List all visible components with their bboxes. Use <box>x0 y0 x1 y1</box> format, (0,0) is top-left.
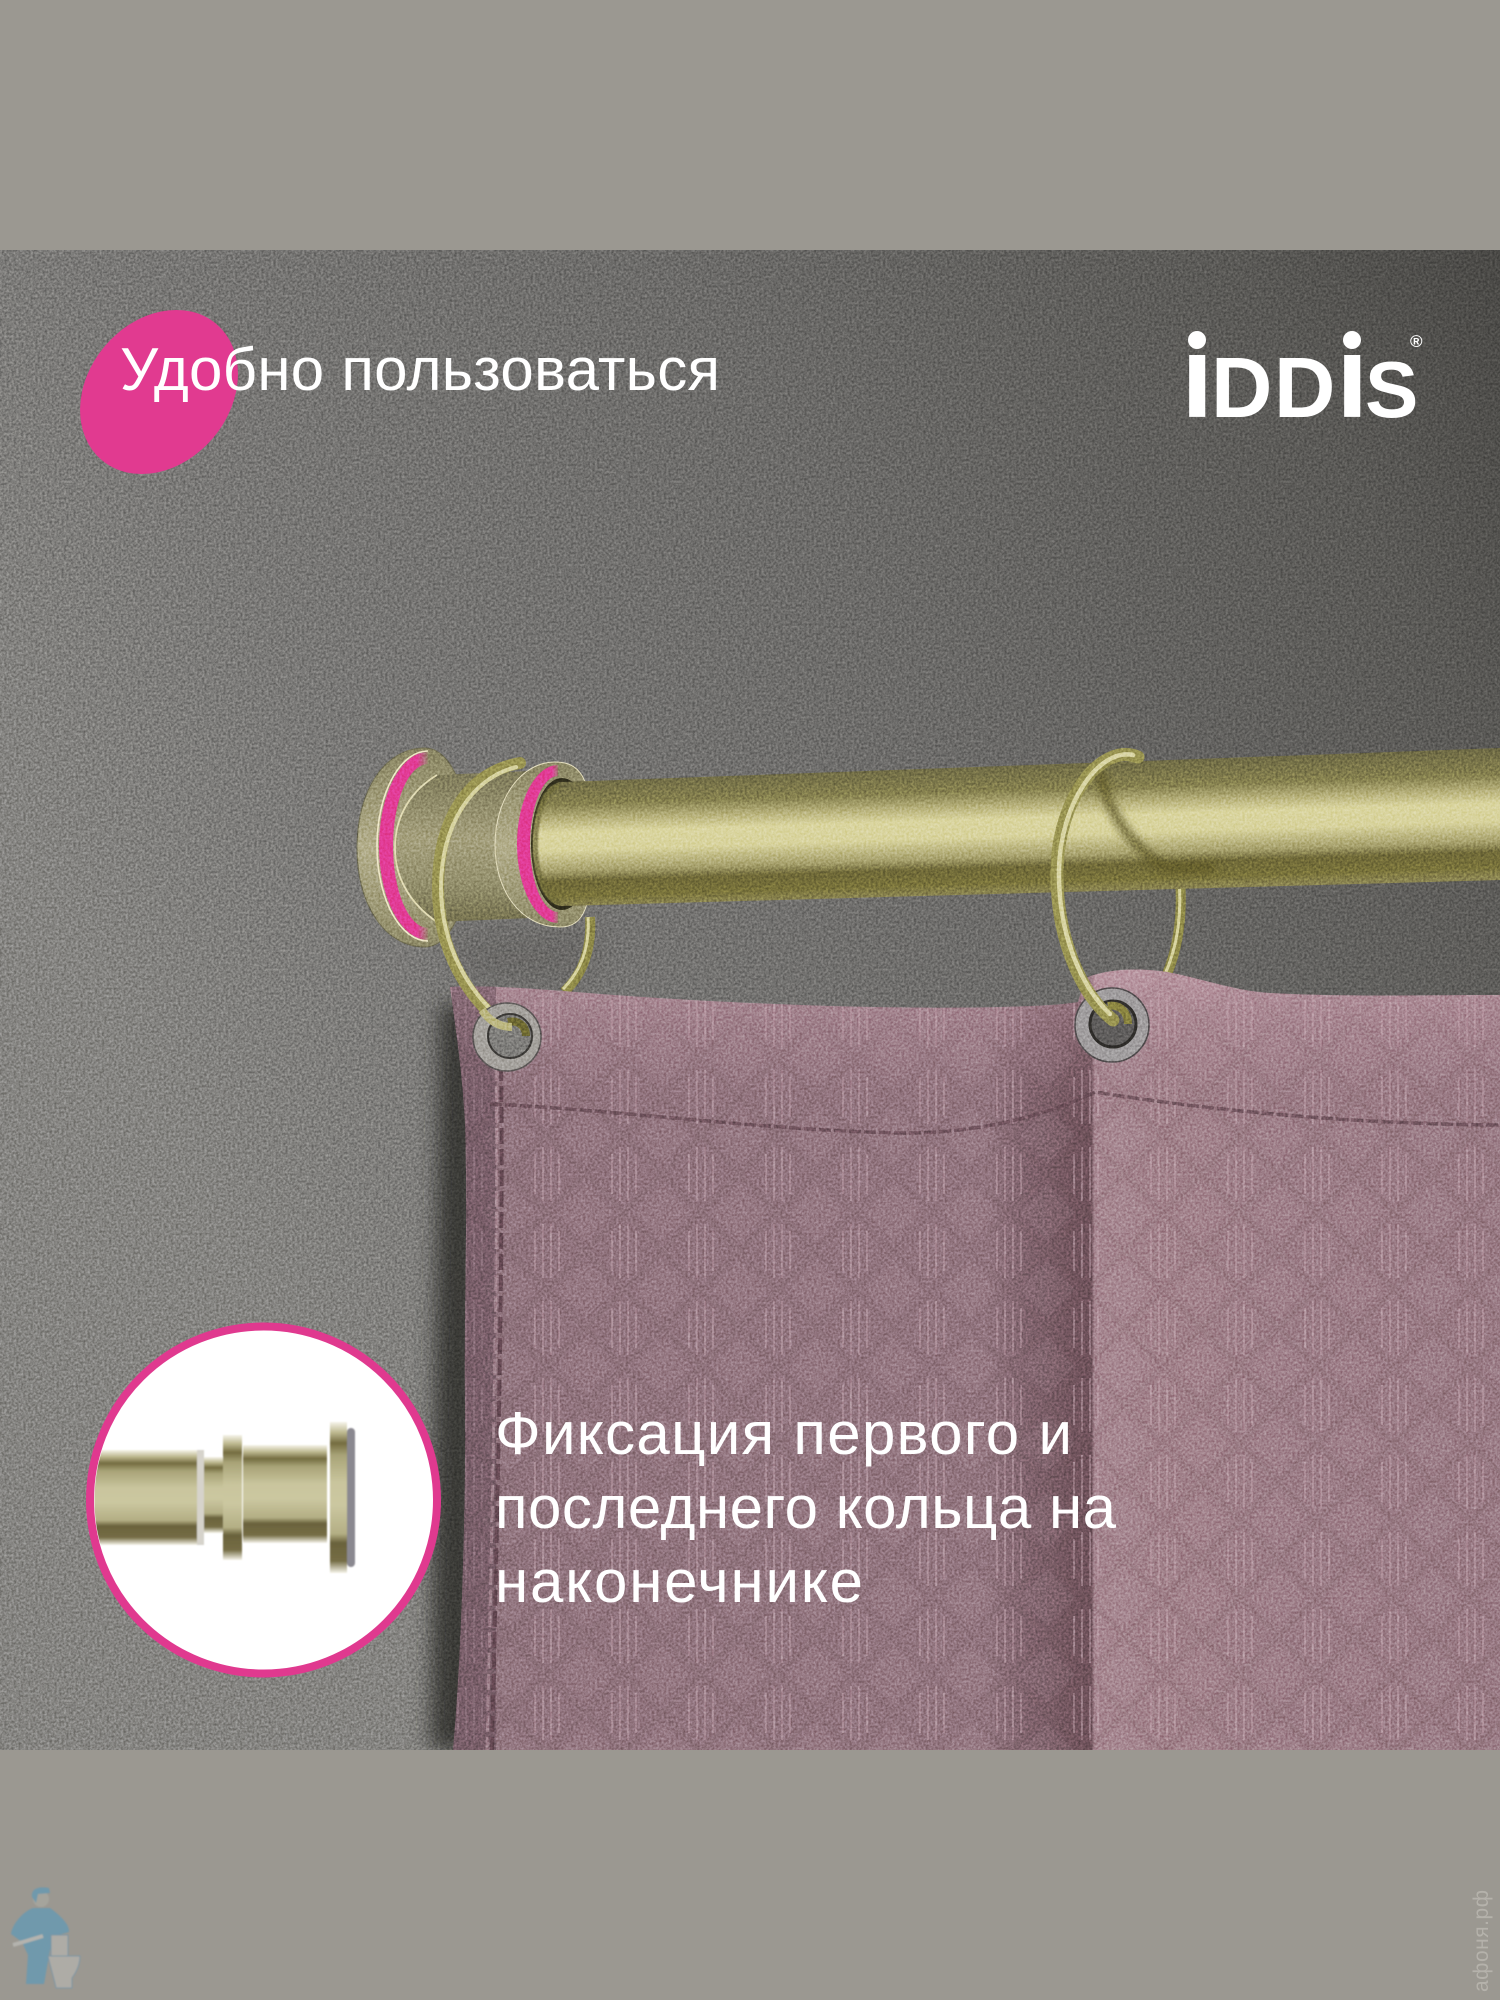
first ring front arc <box>438 763 520 1027</box>
pink blob <box>47 278 271 506</box>
back arc base <box>564 917 590 992</box>
back arc highlight <box>1166 880 1180 972</box>
curtain top highlight <box>440 960 1500 1130</box>
back arc highlight <box>563 917 588 989</box>
grommet hole <box>488 1014 532 1058</box>
mini cap <box>197 1450 204 1545</box>
logo second dot <box>1343 331 1361 349</box>
grommet hole <box>1090 1001 1136 1047</box>
grommet washer <box>1075 988 1149 1062</box>
collar edge highlight <box>395 775 437 922</box>
ring body <box>438 763 520 1027</box>
second grommet <box>1075 988 1149 1062</box>
grommet washer <box>473 1003 541 1071</box>
top grey band <box>0 0 1500 250</box>
plumber head <box>33 1891 49 1907</box>
first grommet <box>473 1003 541 1071</box>
second flange <box>495 762 592 927</box>
curtain hem stitching <box>490 1092 1500 1133</box>
back arc base <box>1167 880 1181 974</box>
bottom grey band <box>0 1750 1500 2000</box>
flange pink accent <box>379 752 428 940</box>
mini neck <box>204 1457 223 1533</box>
rod tube <box>533 748 1500 906</box>
ring end in grommet <box>508 1022 526 1036</box>
ring body <box>1057 755 1138 1020</box>
logo wordmark <box>1181 311 1418 442</box>
toilet tank <box>51 1935 68 1956</box>
logo: iDDiS <box>1181 311 1423 442</box>
circle white disc <box>90 1326 437 1674</box>
first ring tip <box>482 1010 512 1027</box>
rod recess <box>531 778 593 910</box>
mini gray base <box>347 1428 355 1567</box>
curtain side stitching light <box>487 1065 497 1750</box>
ring end in grommet <box>1108 1006 1128 1024</box>
mini body <box>243 1445 327 1543</box>
logo wordmark: S <box>1365 345 1418 434</box>
ring highlight <box>441 767 516 1022</box>
rod end rim shading <box>535 786 560 902</box>
panel: product photo <box>0 250 1500 1750</box>
curtain woven diamond pattern <box>440 960 1500 1750</box>
curtain rod <box>531 748 1500 910</box>
ring highlight <box>1059 754 1133 1014</box>
description line 1: Фиксация первого и <box>495 1400 1072 1467</box>
mini parts <box>90 1422 355 1573</box>
description text <box>495 1400 1117 1615</box>
toilet bowl <box>48 1956 80 1988</box>
logo wordmark: i <box>1181 311 1214 442</box>
wrench <box>13 1936 43 1945</box>
watermark: site name: афоня.рф <box>1470 1890 1493 1992</box>
second flange body <box>495 762 592 927</box>
rod tip detail <box>90 1422 355 1573</box>
rod collar <box>395 771 530 922</box>
mini flange <box>223 1435 242 1560</box>
wall background <box>0 250 1500 1750</box>
first wall flange <box>357 748 468 947</box>
plumber body <box>11 1908 69 1984</box>
back arc of second ring <box>1166 880 1181 974</box>
heading: Удобно пользоваться <box>120 336 720 403</box>
mini rod <box>90 1450 197 1545</box>
flange highlight edge <box>377 751 428 941</box>
second flange pink accent <box>517 765 558 923</box>
plumber hair <box>32 1887 50 1903</box>
curtain fabric <box>440 960 1500 1750</box>
logo wordmark: D <box>1274 341 1335 436</box>
logo registered mark: ® <box>1410 332 1423 351</box>
logo first dot <box>1188 331 1206 349</box>
curtain side stitching dark <box>492 1065 502 1750</box>
curtain shadow on wall <box>430 1005 480 1750</box>
logo wordmark: i <box>1336 311 1369 442</box>
rod shadow from ring <box>1100 770 1215 868</box>
detail circle <box>90 1326 437 1674</box>
description line 2: последнего кольца на <box>495 1474 1117 1541</box>
photo grain <box>0 250 1500 1750</box>
logo wordmark: D <box>1211 341 1272 436</box>
flange body <box>357 748 468 947</box>
mini wall cap <box>330 1422 347 1573</box>
description line 3: наконечнике <box>495 1548 863 1615</box>
flange shadow on wall <box>454 926 594 988</box>
curtain <box>440 960 1500 1750</box>
second ring front arc <box>1057 754 1138 1020</box>
curtain side hem <box>452 985 496 1750</box>
watermark: plumber icon <box>11 1887 80 1988</box>
back arc of first ring <box>563 917 590 992</box>
